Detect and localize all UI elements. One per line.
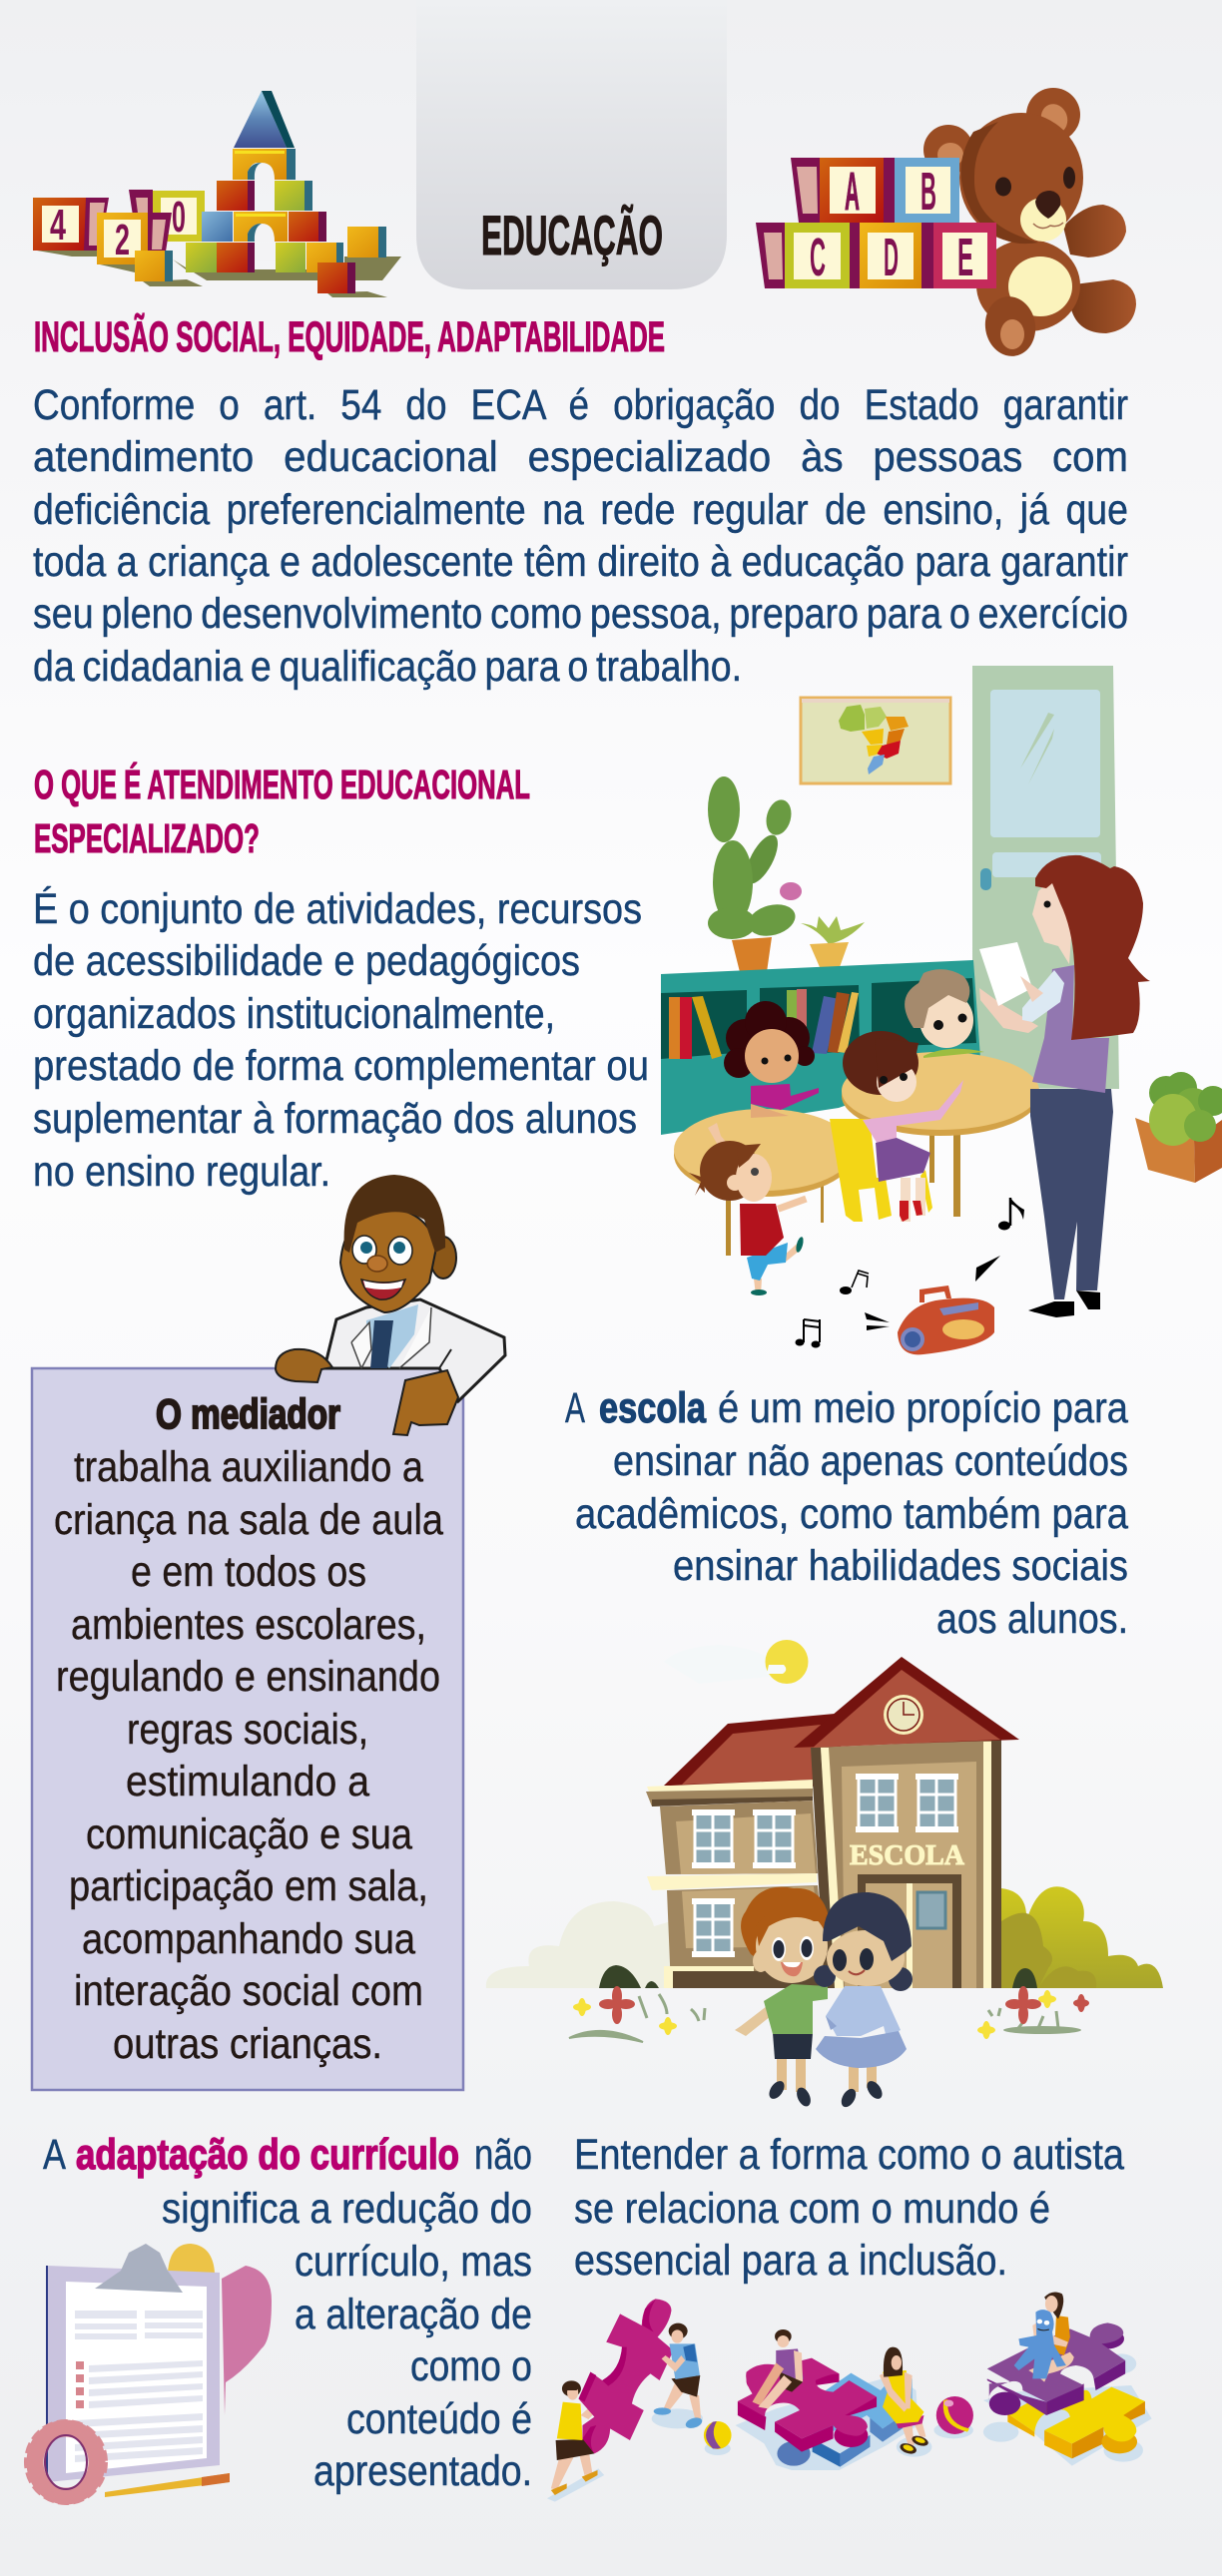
school building — [646, 1657, 1019, 1988]
child: girl on yellow chair — [830, 1031, 963, 1222]
text block: entender o autista: se relaciona com o mundo é — [574, 2185, 1050, 2233]
text block: adaptação do currículo: apresentado. — [313, 2447, 532, 2495]
text block: mediador description: trabalha auxiliando a — [74, 1443, 423, 1491]
text block: adaptação do currículo: A — [43, 2131, 66, 2179]
child: girl in blue dress — [814, 1892, 913, 2110]
text block: a escola: é um meio propício para — [718, 1384, 1128, 1432]
child: yellow dress — [880, 2347, 930, 2456]
block: 2: 2 — [115, 216, 130, 264]
puzzle: blue — [777, 2373, 913, 2467]
text block: adaptação do currículo: conteúdo é — [346, 2395, 532, 2443]
text block: mediador description: interação social com — [74, 1967, 423, 2015]
text block: a escola: aos alunos. — [936, 1595, 1128, 1643]
icon: letter blocks: E — [957, 228, 973, 287]
text block: entender o autista: Entender a forma como o autista — [574, 2131, 1124, 2179]
icon: teddy bear with letter blocks — [756, 88, 1136, 360]
door — [858, 1874, 961, 1988]
text block: adaptação do currículo: significa a redução do — [162, 2185, 532, 2233]
panel: o mediador — [32, 1368, 463, 2090]
ball: magenta — [936, 2396, 973, 2434]
text block: definição: prestado de forma complementar ou — [33, 1042, 649, 1090]
icon: letter blocks: C — [810, 228, 826, 287]
text block: mediador description: estimulando a — [126, 1758, 369, 1805]
teal bookshelf — [661, 960, 980, 1135]
heading: atendimento educacional — [34, 762, 530, 861]
text block: mediador description: participação em sala, — [69, 1862, 428, 1910]
bushes — [486, 1886, 1163, 1988]
text block: a escola — [565, 1384, 1128, 1643]
text block: adaptação do currículo: não — [474, 2131, 532, 2179]
icon: letter blocks: A — [845, 162, 860, 222]
windows — [695, 1777, 955, 1955]
plant box — [1135, 1072, 1222, 1183]
text block: mediador description: regulando e ensinando — [56, 1653, 440, 1701]
front table — [674, 1109, 854, 1256]
text block: mediador description — [54, 1443, 443, 2068]
text block: definição: organizados institucionalmente, — [33, 990, 555, 1038]
puzzle: yellow — [1007, 2387, 1145, 2458]
block: 4: 4 — [50, 201, 66, 250]
icon: teddy bear — [923, 88, 1136, 360]
puzzle: purple — [987, 2322, 1125, 2415]
heading: atendimento educacional: ESPECIALIZADO? — [34, 815, 260, 861]
text block: adaptação do currículo: adaptação do currículo — [76, 2131, 459, 2179]
block: 2 — [97, 213, 172, 264]
heading: o mediador: O mediador — [156, 1390, 340, 1437]
icon: toy block castle — [33, 91, 401, 297]
text block: mediador description: regras sociais, — [127, 1706, 368, 1754]
text block: art. 54: da cidadania e qualificação para o trabalho. — [33, 643, 742, 691]
header tab — [416, 0, 727, 289]
sun and clouds — [664, 1640, 809, 1684]
text block: adaptação do currículo: a alteração de — [295, 2291, 532, 2338]
child: with blue toy — [1014, 2292, 1074, 2382]
doctor left hand — [276, 1349, 332, 1382]
icon: clipboard with gear — [29, 2244, 272, 2500]
illustration: doctor pointing — [276, 1175, 505, 1435]
puzzle: standing magenta — [579, 2299, 673, 2453]
text block: mediador description: criança na sala de aula — [54, 1496, 443, 1544]
icon: letter blocks: D — [884, 228, 899, 287]
text block: a escola: ensinar não apenas conteúdos — [613, 1437, 1128, 1485]
door — [972, 666, 1119, 1089]
text block: mediador description: comunicação e sua — [86, 1810, 412, 1858]
text block: adaptação do currículo — [43, 2131, 532, 2495]
block: 0 — [129, 190, 205, 242]
puzzle: magenta — [738, 2358, 877, 2452]
text block: definição: suplementar à formação dos alunos — [33, 1095, 637, 1143]
text block: a escola: A — [565, 1384, 585, 1432]
child: boy behind table — [905, 969, 984, 1058]
child: girl with curly hair — [724, 1001, 819, 1118]
icon: letter blocks: B — [920, 162, 936, 222]
text block: mediador description: acompanhando sua — [82, 1915, 415, 1963]
text block: art. 54: atendimento educacional especializado às pessoas com — [33, 433, 1128, 481]
text block: a escola: ensinar habilidades sociais — [673, 1542, 1128, 1590]
doctor pointing hand — [393, 1370, 458, 1435]
text block: definição: É o conjunto de atividades, recursos — [33, 885, 642, 933]
text block: adaptação do currículo: currículo, mas — [295, 2238, 532, 2286]
text block: a escola: acadêmicos, como também para — [575, 1490, 1128, 1538]
child: yellow shirt — [551, 2380, 607, 2495]
text block: definição — [33, 885, 649, 1196]
text block: mediador description: ambientes escolares, — [71, 1601, 426, 1649]
child: dancing boy in red — [689, 1123, 808, 1295]
wall map of Brazil — [801, 698, 950, 783]
child: blue shirt — [654, 2323, 704, 2430]
radio and music notes — [795, 1198, 1024, 1354]
text block: entender o autista — [574, 2131, 1124, 2285]
text block: art. 54 — [33, 381, 1128, 691]
cactus plant — [708, 776, 802, 972]
text block: definição: de acessibilidade e pedagógicos — [33, 937, 580, 985]
icon: children with puzzle pieces — [547, 2292, 1152, 2502]
child: boy in green shirt — [735, 1887, 830, 2109]
block: 0: 0 — [172, 193, 186, 242]
illustration: classroom — [661, 666, 1222, 1354]
heading: inclusão social: INCLUSÃO SOCIAL, EQUIDADE, ADAPTABILIDADE — [34, 313, 665, 361]
text block: adaptação do currículo: como o — [410, 2342, 532, 2390]
text block: definição: no ensino regular. — [33, 1148, 330, 1196]
teacher — [979, 855, 1150, 1317]
school sign: ESCOLA — [850, 1840, 965, 1871]
title: EDUCAÇÃO — [481, 204, 663, 266]
puzzle shadows — [547, 2353, 1152, 2502]
text block: mediador description: outras crianças. — [113, 2020, 382, 2068]
small potted plant — [801, 916, 865, 967]
block: 4 — [33, 198, 109, 251]
back table — [842, 1052, 1039, 1217]
illustration: school with children — [486, 1640, 1163, 2110]
text block: mediador description: e em todos os — [131, 1548, 366, 1596]
text block: entender o autista: essencial para a inclusão. — [574, 2237, 1007, 2285]
heading: atendimento educacional: O QUE É ATENDIMENTO EDUCACIONAL — [34, 762, 530, 807]
text block: a escola: escola — [599, 1384, 707, 1432]
flowers and grass — [569, 1986, 1089, 2042]
ball: yellow — [704, 2421, 732, 2449]
icon: letter blocks — [756, 158, 996, 288]
clock — [884, 1695, 923, 1735]
child: seated purple shirt — [753, 2329, 804, 2408]
icon: gear — [29, 2424, 103, 2500]
